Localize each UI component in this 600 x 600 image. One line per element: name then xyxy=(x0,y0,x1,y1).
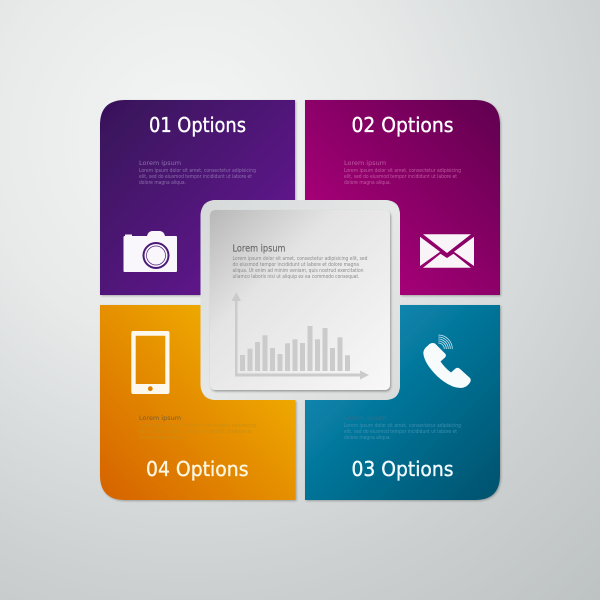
panel: 02 options xyxy=(305,100,500,295)
text block: center: aliqua. Ut enim ad minim veniam, quis nostrud exercitation xyxy=(232,268,364,274)
text block: panel 4 xyxy=(139,414,256,441)
text block: center xyxy=(232,256,368,280)
text block: panel 1: Lorem ipsum xyxy=(139,159,181,167)
text block: panel 3: elit, sed do eiusmod tempor incididunt ut labore et xyxy=(344,429,457,435)
text block: panel 1: dolore magna aliqua. xyxy=(139,180,186,186)
text block: center: ullamco laboris nisi ut aliquip ex ea commodo consequat. xyxy=(232,274,360,280)
halo around center card xyxy=(200,200,400,400)
panel: 03 options xyxy=(305,305,500,500)
text block: panel 2: Lorem ipsum dolor sit amet, consectetur adipisicing xyxy=(344,168,461,174)
heading: 02 Options: 02 Options xyxy=(352,113,454,137)
text block: panel 4: Lorem ipsum dolor sit amet, consectetur adipisicing xyxy=(139,423,256,429)
text block: panel 2: Lorem ipsum xyxy=(344,159,386,167)
icon: telephone xyxy=(423,335,471,388)
icon: envelope xyxy=(420,234,474,268)
icon: camera xyxy=(124,231,177,272)
text block: panel 3 xyxy=(344,414,461,441)
heading: 03 Options: 03 Options xyxy=(352,457,454,481)
panel: 01 options xyxy=(100,100,295,295)
text block: panel 4: dolore magna aliqua. xyxy=(139,435,186,441)
text block: panel 4: Lorem ipsum xyxy=(139,414,181,422)
icon: smartphone xyxy=(131,331,170,394)
text block: panel 3: dolore magna aliqua. xyxy=(344,435,391,441)
text block: panel 2 xyxy=(344,159,461,186)
bar chart xyxy=(232,292,369,380)
panel: 04 options xyxy=(100,305,296,500)
text block: panel 1: Lorem ipsum dolor sit amet, consectetur adipisicing xyxy=(139,168,256,174)
text block: panel 3: Lorem ipsum dolor sit amet, consectetur adipisicing xyxy=(344,423,461,429)
heading: 01 Options: 01 Options xyxy=(149,113,246,137)
text block: panel 2: elit, sed do eiusmod tempor incididunt ut labore et xyxy=(344,174,457,180)
arrow: vertical axis xyxy=(232,292,241,375)
text block: panel 1: elit, sed do eiusmod tempor incididunt ut labore et xyxy=(139,174,252,180)
text block: panel 4: elit, sed do eiusmod tempor incididunt ut labore et xyxy=(139,429,252,435)
text block: center: do eiusmod tempor incididunt ut labore et dolore magna xyxy=(232,262,359,268)
arrow: horizontal axis xyxy=(235,370,369,380)
heading: 04 Options: 04 Options xyxy=(146,457,248,481)
heading: center Lorem ipsum: Lorem ipsum xyxy=(232,244,286,254)
panel: center card xyxy=(210,210,390,390)
text block: panel 1 xyxy=(139,159,256,186)
text block: center: Lorem ipsum dolor sit amet, consectetur adipisicing elit, sed xyxy=(232,256,368,262)
text block: panel 3: Lorem ipsum xyxy=(344,414,386,422)
text block: panel 2: dolore magna aliqua. xyxy=(344,180,391,186)
